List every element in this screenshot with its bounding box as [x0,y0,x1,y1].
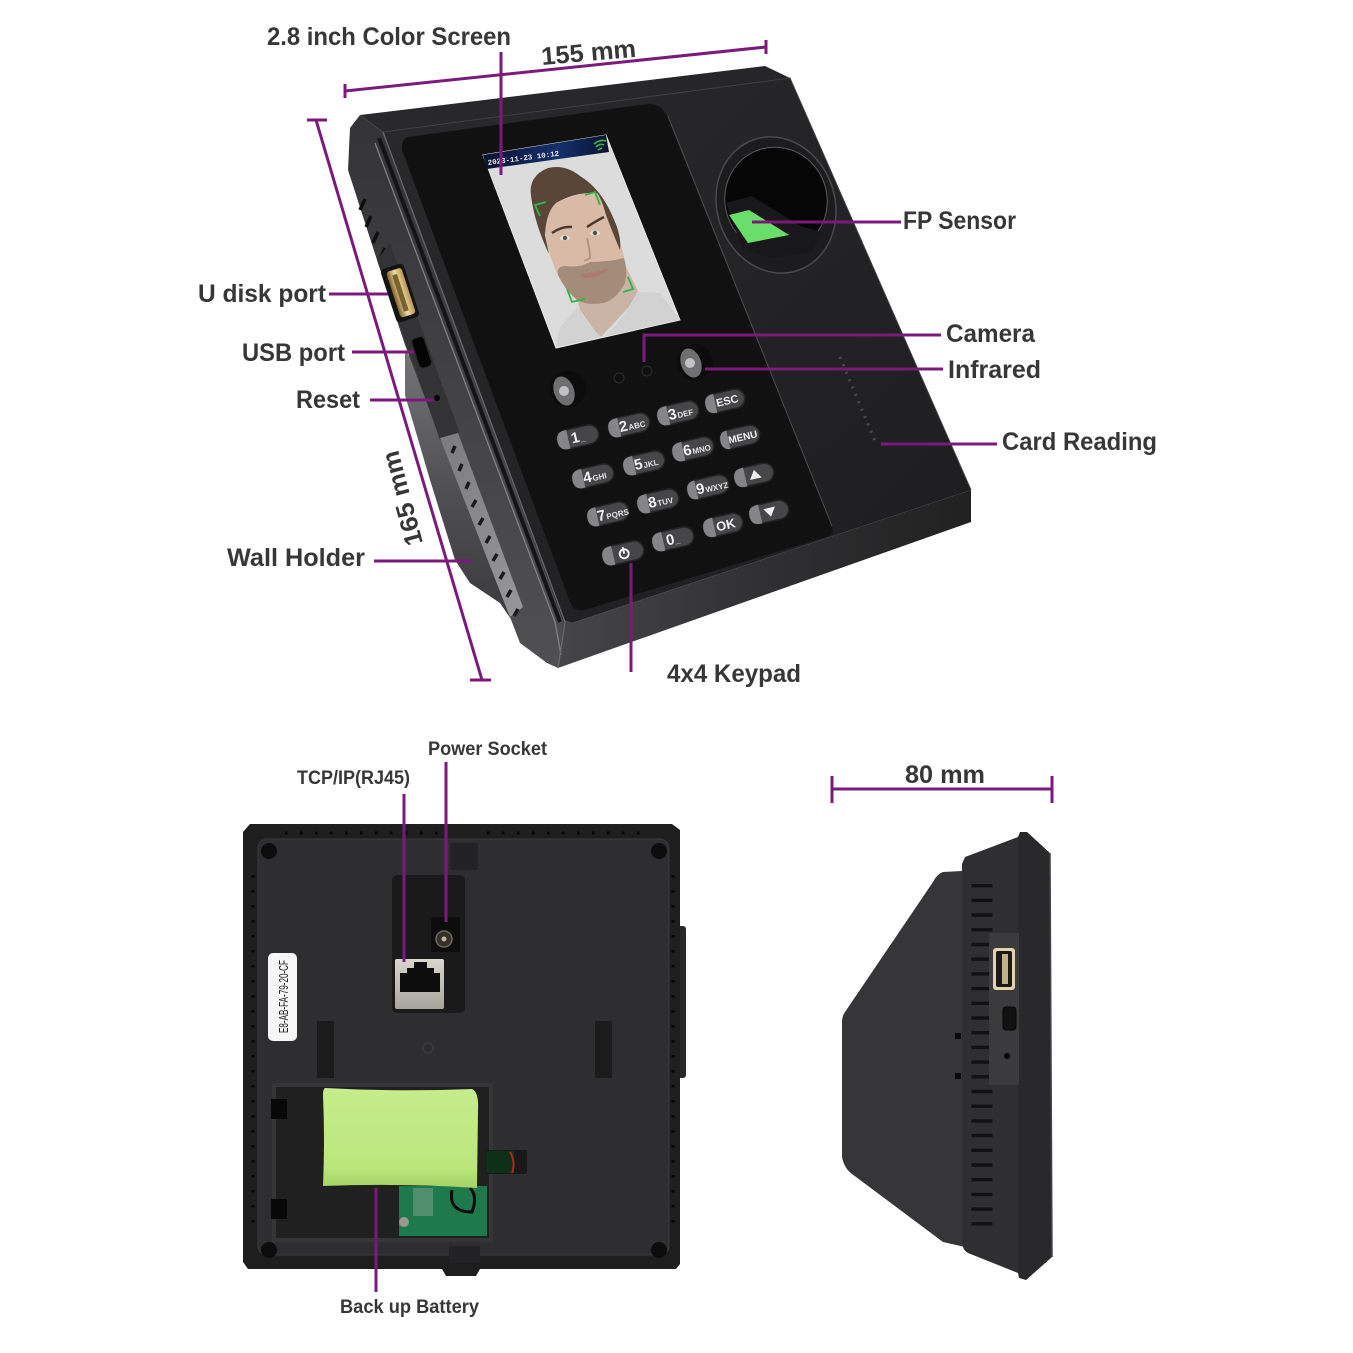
key row 4: 0 [664,531,676,549]
key row 2: MNO [692,443,712,456]
label: FP sensor: FP Sensor [903,207,1016,235]
label: back up battery: Back up Battery [340,1297,479,1318]
right side handle [674,926,686,1078]
key row 4: OK [715,515,738,534]
dimension: 165 mm height [307,120,491,680]
key row 2: GHI [592,471,607,483]
wall holder wedge [842,871,965,1247]
MAC address sticker: E8-AB-FA-79-20-CF [276,960,291,1033]
wedge clips [955,1033,961,1079]
key row 1: ESC [715,393,740,410]
key row 3: 9 [695,480,706,498]
fingerprint well [699,121,853,289]
side rails [375,143,561,655]
green battery [323,1088,478,1188]
center mark [423,1043,433,1053]
wall holder back shell [405,350,515,625]
top right face [360,66,971,623]
mini USB port [1003,1007,1016,1030]
port recess [392,875,465,1013]
port plate [377,243,459,440]
side view of the device [842,832,1052,1280]
inner panel [258,839,669,1255]
key row 2: JKL [643,458,659,470]
power socket [431,917,460,952]
hair [531,167,620,254]
nose [584,238,590,261]
cable notch [485,1150,527,1174]
front view of the device [348,66,971,668]
key row 3: PQRS [606,507,630,521]
label: reset: Reset [296,386,361,414]
key row 3 [585,461,776,528]
reset hole [1004,1053,1010,1059]
label: 2.8 inch color screen: 2.8 inch Color Screen [267,23,511,51]
white shirt [556,292,680,347]
label: U disk port: U disk port [198,280,327,308]
dimension: 80 mm depth [832,761,1052,803]
side vents upper [360,199,385,259]
key row 1: ABC [628,419,647,432]
dimension: 165 mm height: 165 mm [377,448,429,549]
corner screw holes [261,843,667,1258]
face detection brackets [535,192,633,302]
vent dots [253,833,673,1225]
reset hole [434,395,440,401]
key row 2 [570,423,762,490]
infrared lamp right [676,344,713,381]
key row 2: 4 [581,468,594,487]
top edge line [383,78,971,490]
wall holder grey strip [440,433,523,617]
back view of the device [243,824,686,1276]
USB port [993,948,1015,990]
bottom lip [558,490,971,668]
dimension: 155 mm width: 155 mm [540,35,637,71]
dimension: 80 mm depth: 80 mm [905,761,985,789]
key row 3: WXYZ [705,481,729,494]
label: camera [644,320,1036,362]
label: back up battery [340,1188,479,1318]
beard shadow [558,258,626,304]
key row 1: 3 [666,406,678,424]
key row 2: 5 [632,456,644,474]
front bezel [1018,832,1052,1280]
label: infrared: Infrared [948,356,1041,384]
RJ45 network port [395,959,444,1009]
side vents [972,884,992,1228]
key row 4: _ [674,535,681,546]
U disk port [380,263,420,323]
wifi icon [594,140,606,150]
MAC address sticker [268,953,297,1041]
key row 2: MENU [727,429,759,447]
side band [348,115,565,668]
key row 1: _ [579,433,586,444]
key row 1: 2 [617,418,629,436]
label: 4x4 keypad: 4x4 Keypad [667,660,801,688]
key row 3: 8 [646,494,658,512]
label: camera: Camera [946,320,1036,348]
battery compartment [271,1083,527,1242]
green sensor [729,210,789,243]
label: wall holder: Wall Holder [227,544,365,572]
card reading marks [840,357,875,441]
label: power socket: Power Socket [428,739,548,760]
status bar [483,135,609,169]
key row 3: 7 [595,507,607,525]
sensor floor [726,196,822,258]
port plate [989,933,1019,1085]
key row 1: DEF [677,408,694,420]
eyes [560,236,570,240]
mounting slots [317,1021,612,1078]
key row 2: 6 [681,442,693,460]
divider line [668,116,832,526]
key row 1: 1 [569,429,581,447]
label: USB port: USB port [242,339,346,367]
compartment latches [271,1099,287,1219]
key row 1 [555,387,747,451]
mouth [582,269,608,277]
key row 4 [600,498,791,567]
main body [962,837,1018,1273]
LCD screen [483,135,680,348]
label: reset [296,386,434,414]
top and bottom clips [449,843,480,1263]
face [545,193,626,304]
keypad [555,387,791,567]
dimension: 155 mm width [345,35,766,98]
key row 3: TUV [657,496,675,508]
label: card reading: Card Reading [1002,428,1157,456]
circuit board [399,1186,487,1236]
USB port [411,336,433,369]
label: TCP/IP RJ45: TCP/IP(RJ45) [297,768,410,789]
eyebrows [552,217,604,233]
neck [577,265,640,338]
wall holder holes [452,446,518,616]
camera lenses [614,366,652,383]
date and time: 2023-11-23 10:12 [487,151,560,168]
black glass panel [402,104,833,610]
outer shell [243,824,680,1276]
infrared lamp left [549,371,586,409]
